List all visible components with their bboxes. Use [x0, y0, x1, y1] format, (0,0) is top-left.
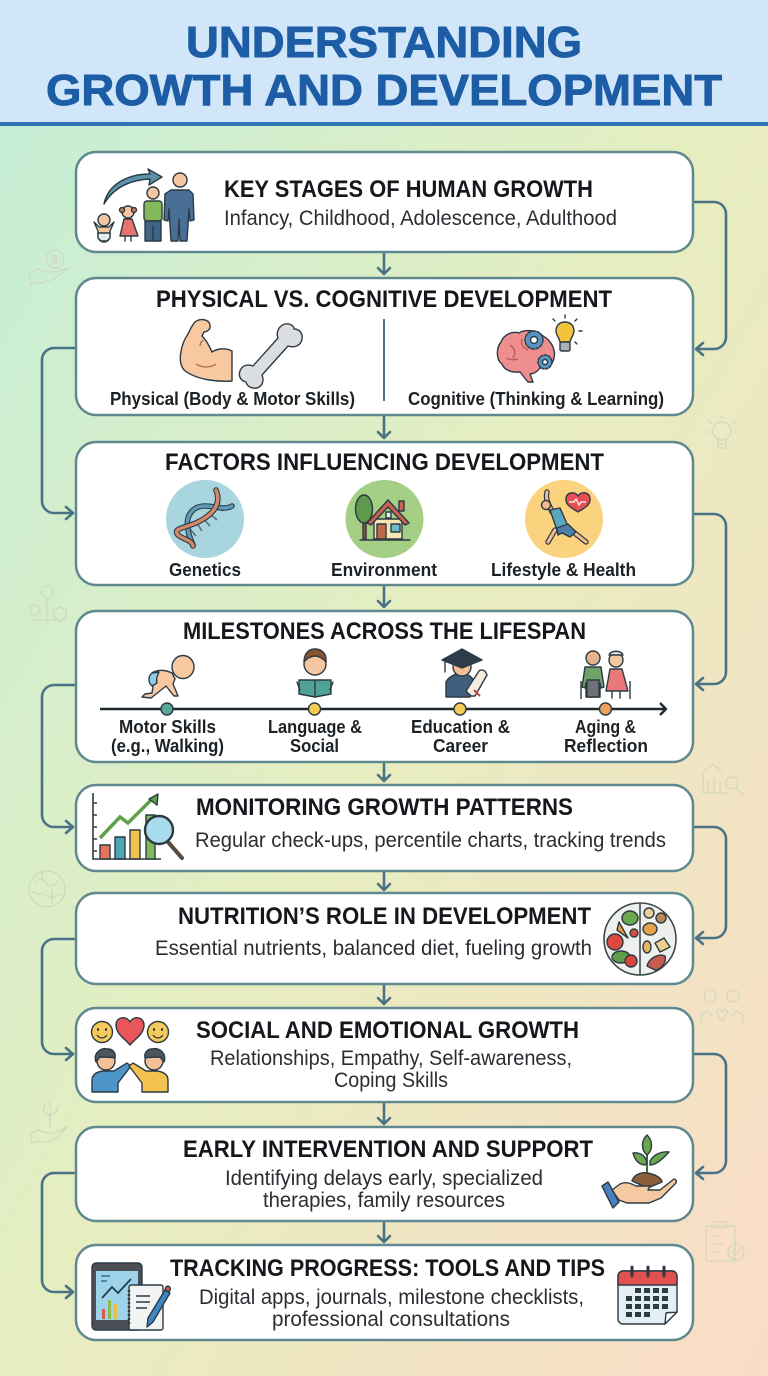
icon: family growth	[94, 169, 194, 242]
milestone label: Reflection	[564, 736, 648, 756]
label: Physical (Body & Motor Skills)	[110, 389, 355, 409]
icon: genetics DNA	[166, 480, 244, 558]
description: Essential nutrients, balanced diet, fueling growth	[155, 937, 592, 960]
milestone label: Social	[290, 736, 339, 756]
panel: tracking progress	[76, 1245, 693, 1340]
milestone label	[111, 717, 224, 756]
milestone label: Career	[433, 736, 488, 756]
milestone label: Language &	[268, 717, 362, 737]
heading: MILESTONES ACROSS THE LIFESPAN	[183, 618, 586, 645]
description: Identifying delays early, specialized	[225, 1167, 543, 1190]
milestone label	[268, 717, 362, 756]
icon: tablet and notebook	[92, 1263, 170, 1330]
heading: SOCIAL AND EMOTIONAL GROWTH	[196, 1017, 579, 1044]
milestone label: Aging &	[575, 717, 636, 737]
timeline	[100, 703, 666, 715]
icon: boy with book	[297, 649, 333, 697]
label: Lifestyle & Health	[491, 560, 636, 580]
decorative faint icon: hand with coin: $	[51, 253, 58, 267]
decorative faint icon: light bulb	[705, 415, 739, 448]
icon: lifestyle and health	[525, 480, 603, 558]
milestone label	[564, 717, 648, 756]
icon: friends with heart	[92, 1018, 168, 1092]
panel: physical vs cognitive	[76, 278, 693, 415]
label: Environment	[331, 560, 437, 580]
panel: milestones	[76, 611, 693, 762]
icon: elderly couple	[581, 651, 630, 699]
heading: KEY STAGES OF HUMAN GROWTH	[224, 176, 593, 203]
description: Infancy, Childhood, Adolescence, Adulthood	[224, 207, 617, 230]
panel: key stages	[76, 152, 693, 252]
icon: crawling baby	[142, 656, 194, 698]
heading: MONITORING GROWTH PATTERNS	[196, 794, 573, 821]
decorative faint icon: couple with heart	[701, 990, 743, 1022]
panel: social emotional	[76, 1008, 693, 1102]
panel: factors	[76, 442, 693, 585]
description: Relationships, Empathy, Self-awareness,	[210, 1047, 572, 1070]
header band	[0, 0, 768, 126]
panel: nutrition	[76, 893, 693, 984]
title: UNDERSTANDING	[186, 18, 582, 67]
description: Digital apps, journals, milestone checklists,	[199, 1286, 584, 1309]
decorative faint icon: plant in hand	[30, 1102, 67, 1143]
heading: EARLY INTERVENTION AND SUPPORT	[183, 1136, 593, 1163]
description	[210, 1047, 572, 1092]
heading: TRACKING PROGRESS: TOOLS AND TIPS	[170, 1255, 605, 1282]
icon: bone	[239, 324, 302, 388]
panel: early intervention	[76, 1127, 693, 1221]
description: therapies, family resources	[263, 1189, 505, 1212]
description	[199, 1286, 584, 1331]
title	[46, 18, 722, 115]
title: GROWTH AND DEVELOPMENT	[46, 66, 722, 115]
milestone label: Motor Skills	[119, 717, 216, 737]
decorative faint icon: clipboard	[706, 1222, 744, 1261]
description	[225, 1167, 543, 1212]
icon: muscle arm	[180, 320, 232, 381]
decorative faint icon: chart with magnifier	[703, 764, 743, 795]
milestone label: (e.g., Walking)	[111, 736, 224, 756]
decorative faint icon: brain circle	[29, 871, 65, 907]
panel: monitoring growth	[76, 785, 693, 871]
milestone label: Education &	[411, 717, 510, 737]
icon: growth chart with magnifier	[93, 793, 182, 859]
heading: PHYSICAL VS. COGNITIVE DEVELOPMENT	[156, 286, 612, 313]
label: Genetics	[169, 560, 241, 580]
icon: calendar	[618, 1267, 677, 1324]
icon: brain with gears and bulb	[497, 315, 582, 382]
description: Regular check-ups, percentile charts, tracking trends	[195, 829, 666, 852]
decorative faint icon: hand with coin	[29, 250, 68, 285]
decorative faint icon: people with heart	[30, 586, 66, 622]
heading: NUTRITION’S ROLE IN DEVELOPMENT	[178, 903, 591, 930]
icon: nutrition plate	[604, 903, 676, 975]
milestone label	[411, 717, 510, 756]
description: professional consultations	[272, 1308, 510, 1331]
icon: environment house	[346, 480, 424, 558]
icon: plant in hand	[602, 1135, 676, 1208]
description: Coping Skills	[334, 1069, 448, 1092]
divider	[383, 319, 385, 401]
connector arrows	[42, 202, 726, 1298]
icon: graduate	[442, 649, 487, 697]
heading: FACTORS INFLUENCING DEVELOPMENT	[165, 449, 604, 476]
label: Cognitive (Thinking & Learning)	[408, 389, 664, 409]
